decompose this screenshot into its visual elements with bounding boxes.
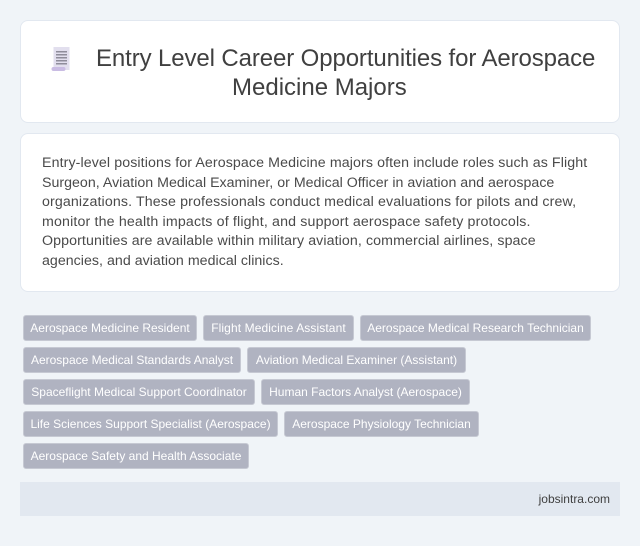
tag: Aerospace Medicine Resident [30,321,190,335]
tag: Aerospace Safety and Health Associate [31,449,241,463]
tag: Aerospace Physiology Technician [292,417,471,431]
icon: document scroll [52,47,70,71]
tag list: career roles [23,315,591,469]
tag [23,379,255,405]
footer bar [20,482,620,516]
text block: description: Surgeon, Aviation Medical Examiner, or Medical Officer in aviation and aerospace [42,175,554,191]
footer text: jobsintra.com [539,492,610,506]
text block: description [42,155,588,269]
tag: Flight Medicine Assistant [211,321,346,335]
tag: Human Factors Analyst (Aerospace) [269,385,462,399]
tag [360,315,591,341]
title: Entry Level Career Opportunities for Aerospace [96,45,595,72]
title [96,45,595,101]
tag [23,315,197,341]
tag [284,411,479,437]
tag [247,347,466,373]
title: Medicine Majors [232,74,407,101]
tag: Aerospace Medical Research Technician [367,321,584,335]
tag [23,347,241,373]
text block: description: monitor the health impacts of flight, and support aerospace safety protocols. [42,214,531,230]
panel: description card [20,133,620,292]
tag: Life Sciences Support Specialist (Aerospace) [30,417,271,431]
tag: Aviation Medical Examiner (Assistant) [256,353,457,367]
tag [23,411,278,437]
tag: Aerospace Medical Standards Analyst [31,353,233,367]
text block: description: Entry-level positions for Aerospace Medicine majors often include roles such as Flight [42,155,587,171]
tag [261,379,470,405]
text block: description: Opportunities are available within military aviation, commercial airlines, space [42,233,536,249]
tag [203,315,354,341]
tag: Spaceflight Medical Support Coordinator [31,385,247,399]
text block: description: agencies, and aviation medical clinics. [42,253,284,269]
tag [23,443,249,469]
panel: header card [20,20,620,123]
text block: description: organizations. These professionals conduct medical evaluations for pilots and crew, [42,194,576,210]
